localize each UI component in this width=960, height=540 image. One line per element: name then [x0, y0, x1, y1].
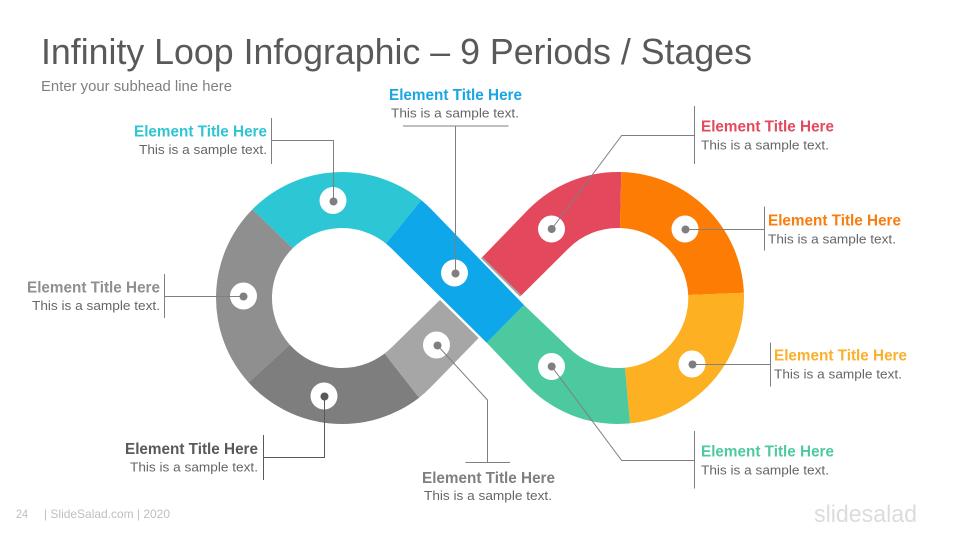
callout: grey: [27, 274, 248, 318]
callout: teal: This is a sample text.: [139, 142, 267, 157]
callout: light grey: [422, 342, 555, 503]
callout: yellow: [688, 342, 907, 386]
segment: dark grey: [248, 345, 419, 424]
callout: grey: Element Title Here: [27, 280, 160, 297]
callout: light grey: This is a sample text.: [424, 488, 552, 503]
segment: grey: [216, 209, 293, 382]
callout: yellow: Element Title Here: [774, 348, 907, 365]
segment: green: [487, 305, 630, 424]
callout: orange: [682, 206, 901, 250]
callout: blue: This is a sample text.: [391, 105, 519, 120]
title: Infinity Loop Infographic – 9 Periods / Stages: [41, 31, 752, 72]
callout: dark grey: [125, 392, 328, 480]
callout: teal: [134, 118, 338, 206]
callout: grey: This is a sample text.: [32, 298, 160, 313]
infinity loop: [216, 172, 744, 424]
segment: yellow: [625, 293, 744, 423]
callout: red: This is a sample text.: [701, 137, 829, 152]
segment: light grey: [385, 300, 479, 398]
callout: green: Element Title Here: [701, 444, 834, 461]
callout: blue: [389, 87, 522, 278]
callout: red: [548, 106, 834, 233]
footer: page number and source: 24: [16, 507, 28, 521]
segment: blue: [386, 200, 524, 343]
footer: page number and source: | SlideSalad.com | 2020: [44, 507, 170, 521]
marker rings: [230, 187, 706, 410]
segment: orange: [620, 172, 744, 295]
callout: green: [548, 362, 834, 488]
callout: yellow: This is a sample text.: [774, 366, 902, 382]
callout: blue: Element Title Here: [389, 87, 522, 104]
callout: dark grey: This is a sample text.: [130, 460, 258, 475]
segment: red: [482, 172, 621, 296]
callout: teal: Element Title Here: [134, 124, 267, 140]
segment: teal: [252, 172, 421, 248]
callout: orange: Element Title Here: [768, 213, 901, 230]
callout: green: This is a sample text.: [701, 462, 829, 477]
logo: slidesalad: [814, 501, 917, 528]
subhead: Enter your subhead line here: [41, 78, 232, 95]
segment: red edge sliver: [482, 258, 521, 296]
callout: orange: This is a sample text.: [768, 231, 896, 246]
callout: red: Element Title Here: [701, 118, 834, 136]
callout: dark grey: Element Title Here: [125, 441, 258, 458]
callout: light grey: Element Title Here: [422, 470, 555, 487]
